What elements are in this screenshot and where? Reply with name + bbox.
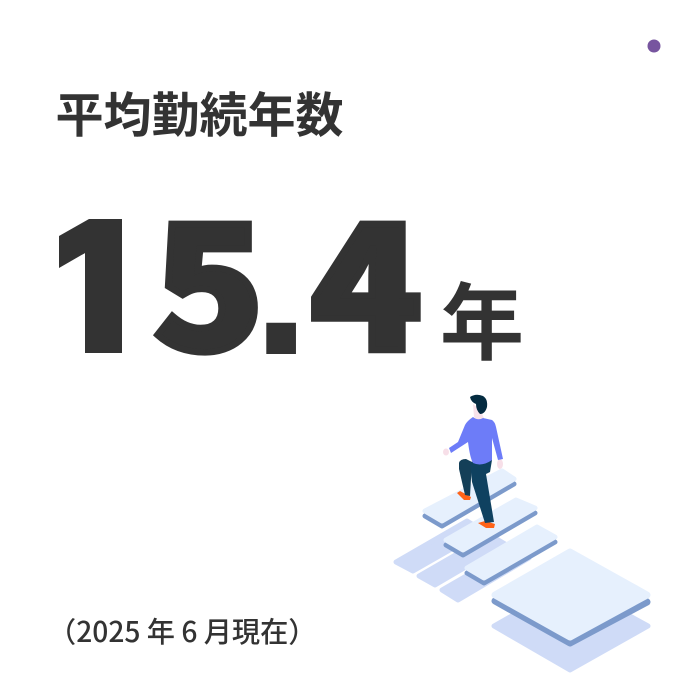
torso and arms [449,417,503,464]
step shadows [396,521,648,670]
date note: （2025 年 6 月現在） [48,610,316,651]
unit label: 年 [440,257,524,378]
person [443,395,503,528]
shoes [457,491,471,500]
step 2 [446,500,535,555]
title: 平均勤続年数 [56,76,344,146]
neck [473,404,484,420]
front leg [470,460,494,523]
step 3 [467,527,555,583]
big number: . [254,176,308,395]
front hand [497,459,503,469]
hair [470,395,487,414]
big number [59,219,421,356]
illustration: person climbing steps [396,395,648,670]
icon: purple dot [648,40,660,52]
big number: 4 [310,154,422,399]
large platform [495,552,647,643]
big number: 1 [52,152,163,404]
back hand [443,448,449,456]
big number: 5 [153,154,264,399]
step 1 [425,471,514,526]
infographic canvas [58,40,660,672]
back leg [459,459,472,496]
